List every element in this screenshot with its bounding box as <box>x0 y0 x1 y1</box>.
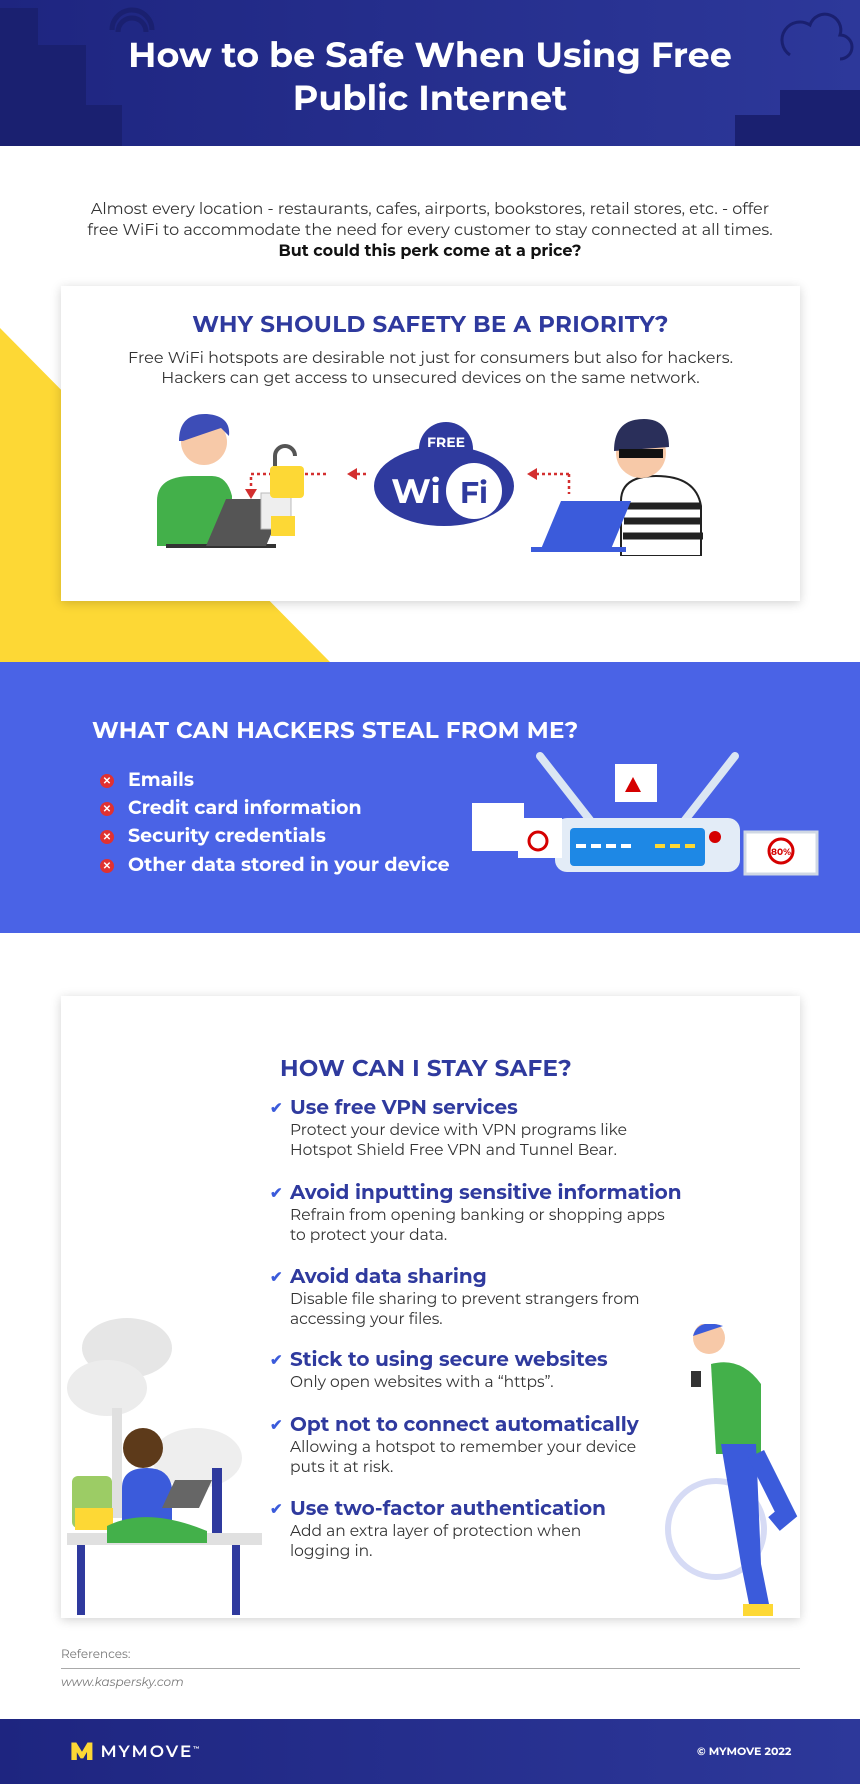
bullet list: Security credentials <box>128 824 326 847</box>
decorative buildings <box>0 8 860 146</box>
logo: M MYMOVE™ <box>70 1737 201 1767</box>
bullet list: Credit card information <box>128 796 362 819</box>
list: safety tips: puts it at risk. <box>290 1457 393 1476</box>
text block <box>128 349 733 388</box>
bullet list: ✕ <box>103 859 111 872</box>
hacker <box>531 419 703 556</box>
references: References: <box>61 1647 130 1662</box>
bullet list: ✕ <box>103 802 111 815</box>
references <box>61 1647 800 1690</box>
header banner <box>0 0 860 146</box>
bullet list: ✕ <box>103 830 111 843</box>
list: safety tips: Only open websites with a “https”. <box>290 1372 554 1391</box>
panel: how can I stay safe <box>61 996 800 1618</box>
icon: wifi cloud: Fi <box>460 474 488 511</box>
list: safety tips: Hotspot Shield Free VPN and Tunnel Bear. <box>290 1140 617 1159</box>
list: safety tips: accessing your files. <box>290 1309 443 1328</box>
yellow triangle decoration <box>0 328 330 662</box>
illustration: router: 80% <box>771 847 791 858</box>
list: safety tips: Use two-factor authentication <box>290 1497 606 1521</box>
copyright: © MYMOVE 2022 <box>697 1744 791 1758</box>
list: safety tips: Avoid data sharing <box>290 1265 487 1289</box>
bullet list: Other data stored in your device <box>128 853 450 876</box>
arrow <box>347 468 366 480</box>
heading: WHY SHOULD SAFETY BE A PRIORITY? <box>192 310 669 338</box>
user <box>157 414 295 548</box>
intro text: free WiFi to accommodate the need for every customer to stay connected at all times. <box>87 221 773 240</box>
list: safety tips: Protect your device with VPN programs like <box>290 1120 627 1139</box>
list: safety tips: Opt not to connect automatically <box>290 1413 639 1437</box>
list: safety tips: Avoid inputting sensitive information <box>290 1181 682 1205</box>
title: How to be Safe When Using Free <box>128 33 732 76</box>
text block: Free WiFi hotspots are desirable not just for consumers but also for hackers. <box>128 349 733 368</box>
panel: why safety <box>61 286 800 601</box>
intro text: Almost every location - restaurants, cafes, airports, bookstores, retail stores, etc. - offer <box>91 200 769 219</box>
icon: wifi cloud: Wi <box>391 470 441 512</box>
arrow <box>245 474 326 499</box>
text block: Hackers can get access to unsecured devices on the same network. <box>161 369 700 388</box>
heading: WHAT CAN HACKERS STEAL FROM ME? <box>92 716 578 744</box>
bullet list <box>100 768 450 876</box>
panel: what can hackers steal <box>0 662 860 933</box>
icon: lock <box>270 446 304 498</box>
list: safety tips: Refrain from opening banking or shopping apps <box>290 1205 665 1224</box>
illustration: man with bike <box>665 1324 798 1616</box>
list: safety tips <box>271 1096 682 1560</box>
list: safety tips: Allowing a hotspot to remember your device <box>290 1437 636 1456</box>
list: safety tips: to protect your data. <box>290 1225 447 1244</box>
list: safety tips: Disable file sharing to prevent strangers from <box>290 1289 640 1308</box>
heading: HOW CAN I STAY SAFE? <box>280 1054 572 1082</box>
list: safety tips: Stick to using secure websites <box>290 1348 608 1372</box>
illustration: router <box>472 752 818 876</box>
footer <box>0 1719 860 1784</box>
references: www.kaspersky.com <box>61 1675 184 1690</box>
bullet list: ✕ <box>103 774 111 787</box>
icon: wifi cloud <box>374 422 514 526</box>
title: Public Internet <box>293 76 567 119</box>
icon: wifi cloud: FREE <box>427 433 465 451</box>
list: safety tips: Add an extra layer of protection when <box>290 1521 581 1540</box>
arrow <box>527 468 569 494</box>
intro text: But could this perk come at a price? <box>279 242 581 261</box>
title <box>128 33 732 119</box>
text: logging in. <box>290 1541 372 1560</box>
list: safety tips: Use free VPN services <box>290 1096 518 1120</box>
illustration: wifi hacking <box>157 414 703 556</box>
illustration: woman on bench <box>67 1318 262 1615</box>
intro text <box>87 200 773 261</box>
bullet list: Emails <box>128 768 194 791</box>
